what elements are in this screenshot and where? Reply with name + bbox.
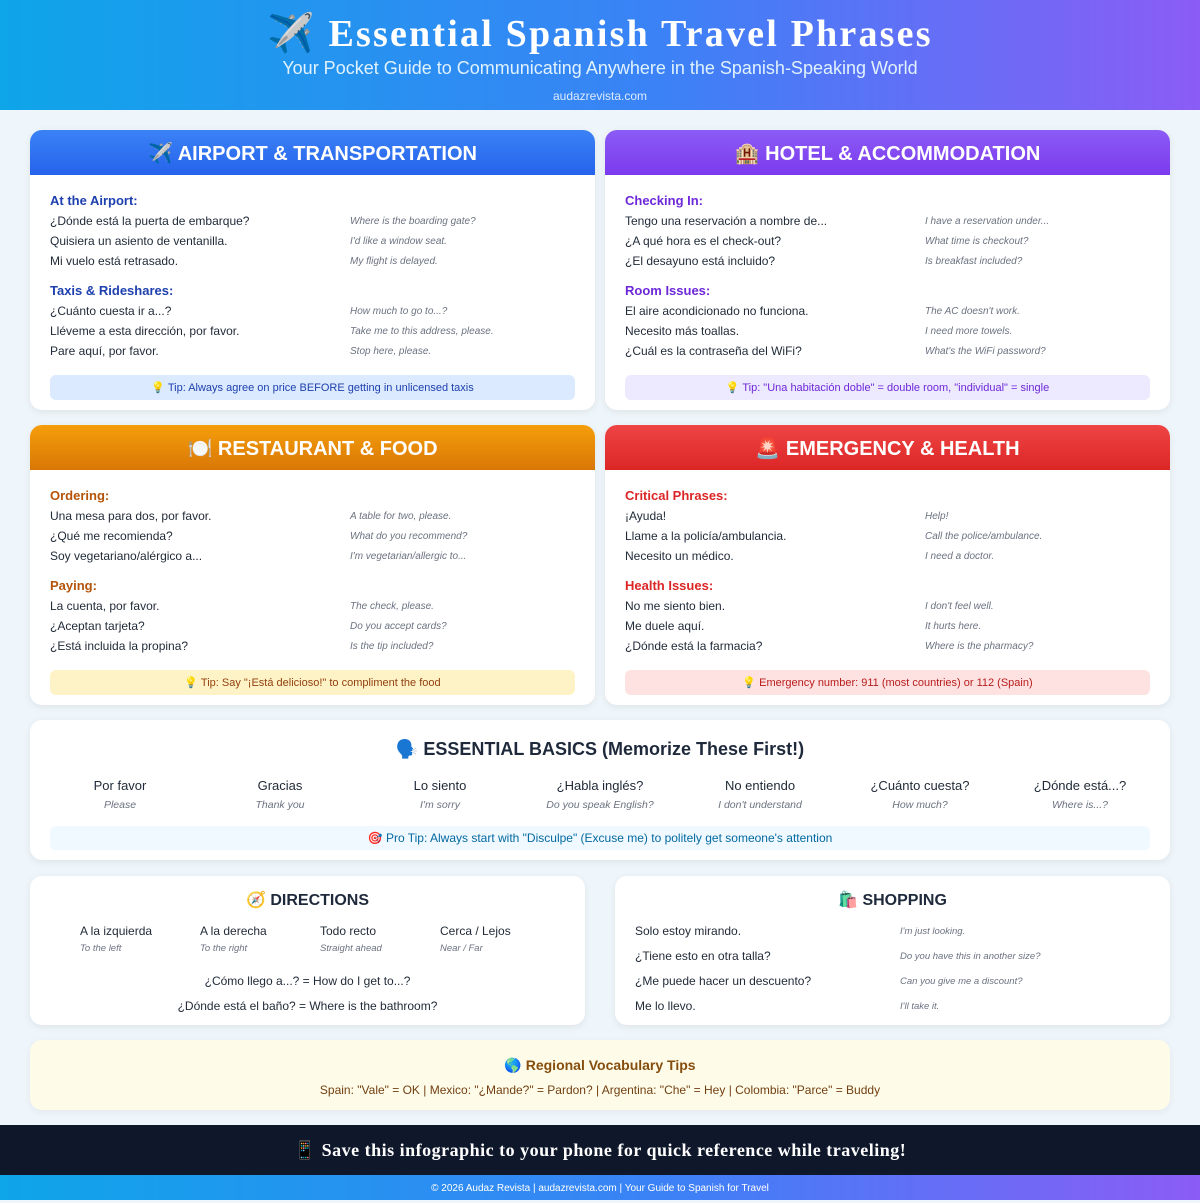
panel: airport: How much to go to...? xyxy=(350,306,447,317)
panel: directions: Near / Far xyxy=(440,943,483,954)
panel: shopping: I'm just looking. xyxy=(900,926,965,937)
panel: shopping: I'll take it. xyxy=(900,1001,939,1012)
panel: hotel: What's the WiFi password? xyxy=(925,346,1046,357)
panel: emergency: ¿Dónde está la farmacia? xyxy=(625,639,762,653)
panel: shopping: Do you have this in another size? xyxy=(900,951,1040,962)
panel: hotel: I need more towels. xyxy=(925,326,1012,337)
section: taxis: Taxis & Rideshares: xyxy=(50,283,173,298)
footer callout xyxy=(0,1125,1200,1175)
panel: restaurant: Do you accept cards? xyxy=(350,621,447,632)
panel: emergency: Where is the pharmacy? xyxy=(925,641,1033,652)
panel: airport: ¿Dónde está la puerta de embarque? xyxy=(50,214,249,228)
panel: hotel: El aire acondicionado no funciona. xyxy=(625,304,808,318)
panel: emergency: Necesito un médico. xyxy=(625,549,734,563)
panel: airport: Where is the boarding gate? xyxy=(350,216,476,227)
panel: hotel: Necesito más toallas. xyxy=(625,324,739,338)
panel: hotel: What time is checkout? xyxy=(925,236,1028,247)
panel: emergency: I don't feel well. xyxy=(925,601,994,612)
panel: essential basics: How much? xyxy=(892,799,948,811)
panel: essential basics: Please xyxy=(104,799,136,811)
tip xyxy=(50,375,575,400)
heading: hotel xyxy=(605,130,1170,175)
section: critical: Critical Phrases: xyxy=(625,488,728,503)
tip xyxy=(625,375,1150,400)
panel: restaurant: Soy vegetariano/alérgico a... xyxy=(50,549,202,563)
heading: emergency xyxy=(605,425,1170,470)
panel: restaurant: What do you recommend? xyxy=(350,531,467,542)
copyright bar xyxy=(0,1175,1200,1200)
heading: airport: ✈️ AIRPORT & TRANSPORTATION xyxy=(148,143,477,165)
panel: emergency: No me siento bien. xyxy=(625,599,725,613)
panel: airport: Pare aquí, por favor. xyxy=(50,344,159,358)
panel: hotel: Tengo una reservación a nombre de... xyxy=(625,214,827,228)
section: paying: Paying: xyxy=(50,578,97,593)
panel: restaurant: ¿Está incluida la propina? xyxy=(50,639,188,653)
panel: hotel xyxy=(605,130,1170,410)
heading: airport xyxy=(30,130,595,175)
panel: hotel: ¿A qué hora es el check-out? xyxy=(625,234,781,248)
title: ✈️ Essential Spanish Travel Phrases xyxy=(267,13,933,55)
panel: emergency xyxy=(605,425,1170,705)
panel: airport: My flight is delayed. xyxy=(350,256,438,267)
panel: airport: ¿Cuánto cuesta ir a...? xyxy=(50,304,171,318)
regional text: Spain: "Vale" = OK | Mexico: "¿Mande?" = Pardon? | Argentina: "Che" = Hey | Colombia: "Parce" = Buddy xyxy=(320,1083,880,1097)
tip xyxy=(625,670,1150,695)
heading: hotel: 🏨 HOTEL & ACCOMMODATION xyxy=(735,143,1040,165)
panel: restaurant: ¿Qué me recomienda? xyxy=(50,529,173,543)
panel: shopping xyxy=(615,876,1170,1025)
panel: essential basics: Lo siento xyxy=(414,778,466,793)
heading: regional: 🌎 Regional Vocabulary Tips xyxy=(504,1057,696,1073)
tip: 💡 Tip: "Una habitación doble" = double room, "individual" = single xyxy=(726,382,1049,394)
panel: essential basics: ¿Dónde está...? xyxy=(1034,778,1126,793)
panel: emergency: Call the police/ambulance. xyxy=(925,531,1042,542)
panel: essential basics: I'm sorry xyxy=(420,799,460,811)
panel: directions: ¿Cómo llego a...? = How do I get to...? xyxy=(205,974,410,988)
footer callout: 📱 Save this infographic to your phone for quick reference while traveling! xyxy=(294,1140,906,1160)
panel: restaurant: Una mesa para dos, por favor. xyxy=(50,509,211,523)
panel: airport: Quisiera un asiento de ventanilla. xyxy=(50,234,227,248)
panel: essential basics: ¿Cuánto cuesta? xyxy=(870,778,970,793)
panel: essential basics: ¿Habla inglés? xyxy=(557,778,643,793)
heading: restaurant xyxy=(30,425,595,470)
panel: restaurant xyxy=(30,425,595,705)
subtitle: Your Pocket Guide to Communicating Anywhere in the Spanish-Speaking World xyxy=(282,58,918,78)
panel: restaurant: The check, please. xyxy=(350,601,434,612)
panel: restaurant: I'm vegetarian/allergic to... xyxy=(350,551,466,562)
panel: emergency: It hurts here. xyxy=(925,621,981,632)
panel: hotel: ¿El desayuno está incluido? xyxy=(625,254,775,268)
panel: essential basics: No entiendo xyxy=(725,778,795,793)
section: room issues: Room Issues: xyxy=(625,283,710,298)
tip: 💡 Emergency number: 911 (most countries) or 112 (Spain) xyxy=(742,677,1033,689)
panel: directions: A la izquierda xyxy=(80,924,152,938)
panel: shopping: Solo estoy mirando. xyxy=(635,924,741,938)
panel: hotel: Is breakfast included? xyxy=(925,256,1022,267)
section: checking in: Checking In: xyxy=(625,193,703,208)
heading: shopping: 🛍️ SHOPPING xyxy=(838,892,947,909)
panel: directions: Cerca / Lejos xyxy=(440,924,511,938)
panel: regional tips xyxy=(30,1040,1170,1110)
section: health: Health Issues: xyxy=(625,578,713,593)
panel: directions: Todo recto xyxy=(320,924,376,938)
panel: airport xyxy=(30,130,595,410)
panel: directions: A la derecha xyxy=(200,924,267,938)
panel: emergency: Me duele aquí. xyxy=(625,619,704,633)
tip xyxy=(50,670,575,695)
panel: essential basics: Por favor xyxy=(94,778,146,793)
panel: restaurant: ¿Aceptan tarjeta? xyxy=(50,619,145,633)
panel: emergency: ¡Ayuda! xyxy=(625,509,666,523)
panel: hotel: I have a reservation under... xyxy=(925,216,1049,227)
panel: directions: To the right xyxy=(200,943,247,954)
panel: essential basics: Thank you xyxy=(255,799,305,811)
heading: directions: 🧭 DIRECTIONS xyxy=(246,892,369,909)
panel: directions xyxy=(30,876,585,1025)
copyright bar: © 2026 Audaz Revista | audazrevista.com | Your Guide to Spanish for Travel xyxy=(431,1183,769,1194)
panel: emergency: Help! xyxy=(925,511,948,522)
panel: airport: Lléveme a esta dirección, por favor. xyxy=(50,324,239,338)
panel: emergency: Llame a la policía/ambulancia. xyxy=(625,529,786,543)
heading: emergency: 🚨 EMERGENCY & HEALTH xyxy=(755,438,1020,460)
tip: 💡 Tip: Always agree on price BEFORE getting in unlicensed taxis xyxy=(151,382,474,394)
panel: hotel: The AC doesn't work. xyxy=(925,306,1020,317)
panel: shopping: Me lo llevo. xyxy=(635,999,696,1013)
pro tip: 🎯 Pro Tip: Always start with "Disculpe" (Excuse me) to politely get someone's attention xyxy=(368,831,832,845)
panel: essential basics xyxy=(30,720,1170,860)
panel: essential basics: Gracias xyxy=(258,778,302,793)
pro tip xyxy=(50,826,1150,850)
panel: essential basics: Do you speak English? xyxy=(546,799,654,811)
panel: directions: ¿Dónde está el baño? = Where is the bathroom? xyxy=(178,999,437,1013)
heading: restaurant: 🍽️ RESTAURANT & FOOD xyxy=(187,438,438,460)
panel: restaurant: A table for two, please. xyxy=(350,511,451,522)
panel: airport: Take me to this address, please. xyxy=(350,326,494,337)
panel: airport: I'd like a window seat. xyxy=(350,236,447,247)
panel: emergency: I need a doctor. xyxy=(925,551,994,562)
panel: airport: Stop here, please. xyxy=(350,346,431,357)
panel: shopping: ¿Tiene esto en otra talla? xyxy=(635,949,771,963)
panel: restaurant: Is the tip included? xyxy=(350,641,433,652)
panel: hotel: ¿Cuál es la contraseña del WiFi? xyxy=(625,344,802,358)
header xyxy=(0,0,1200,110)
heading: basics: 🗣️ ESSENTIAL BASICS (Memorize These First!) xyxy=(396,739,804,759)
panel: essential basics: Where is...? xyxy=(1052,799,1108,811)
panel: shopping: ¿Me puede hacer un descuento? xyxy=(635,974,811,988)
section: at the airport: At the Airport: xyxy=(50,193,138,208)
panel: essential basics: I don't understand xyxy=(718,799,802,811)
section: ordering: Ordering: xyxy=(50,488,109,503)
panel: directions: To the left xyxy=(80,943,121,954)
panel: shopping: Can you give me a discount? xyxy=(900,976,1023,987)
tip: 💡 Tip: Say "¡Está delicioso!" to compliment the food xyxy=(184,677,441,689)
site url: audazrevista.com xyxy=(553,89,647,103)
panel: airport: Mi vuelo está retrasado. xyxy=(50,254,178,268)
panel: directions: Straight ahead xyxy=(320,943,382,954)
panel: restaurant: La cuenta, por favor. xyxy=(50,599,159,613)
